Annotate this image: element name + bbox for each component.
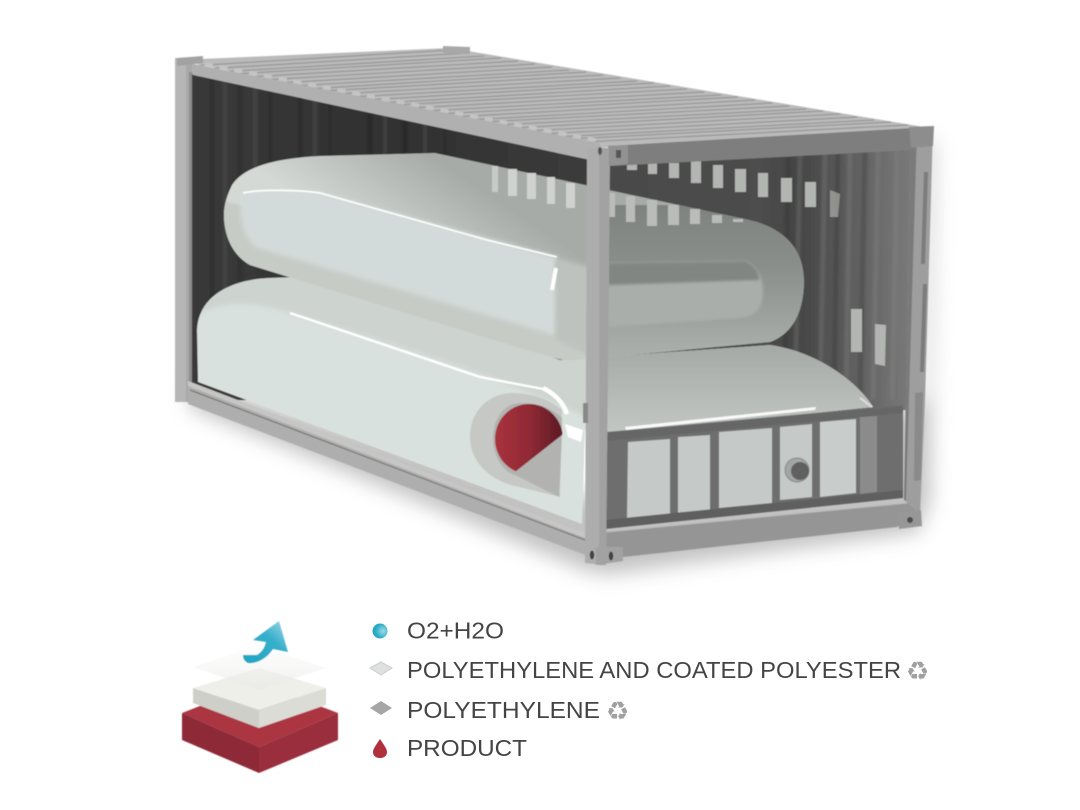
- cutaway showing red product: [470, 393, 563, 497]
- front top beam: [608, 127, 930, 166]
- infographic canvas: [174, 46, 944, 774]
- right-side bag reflections: [608, 193, 743, 226]
- corrugated roof: [178, 46, 930, 148]
- wall light reflections: [627, 161, 886, 366]
- legend item: O2+H2O: O2+H2O: [407, 618, 504, 644]
- front end frame and panels: [605, 405, 903, 529]
- left rear post: [175, 56, 203, 402]
- upper flexitank bag: [220, 150, 810, 372]
- polyethylene layer: [193, 668, 326, 728]
- roof side beam with corrugation teeth: [183, 62, 600, 162]
- layered material diagram: [182, 621, 338, 773]
- front corner post: [583, 147, 623, 565]
- interior right wall: [608, 145, 912, 440]
- translucent barrier layer: [193, 645, 326, 690]
- right front post: [897, 126, 934, 529]
- shipping container illustration: [175, 46, 934, 565]
- drain valve: [785, 458, 809, 482]
- legend item: polyethylene: POLYETHYLENE: [407, 697, 600, 723]
- legend item: product: PRODUCT: [407, 735, 527, 761]
- lower flexitank bag: [190, 270, 890, 530]
- red product block: [182, 683, 338, 773]
- container drop shadow: [190, 140, 934, 574]
- teal arrow: [243, 621, 288, 663]
- legend item: polyethylene: ♻: [606, 697, 629, 727]
- legend item: polyethylene and coated polyester: ♻: [906, 657, 929, 687]
- legend item: polyethylene: [370, 697, 629, 727]
- interior left wall: [190, 66, 596, 400]
- legend: [370, 618, 929, 761]
- bag surface reflections: [492, 166, 575, 208]
- front corner casting: [609, 145, 628, 166]
- bottom side rail: [188, 381, 590, 556]
- front bottom beam: [605, 502, 920, 560]
- legend item: polyethylene and coated polyester: POLYETHYLENE AND COATED POLYESTER: [407, 657, 901, 683]
